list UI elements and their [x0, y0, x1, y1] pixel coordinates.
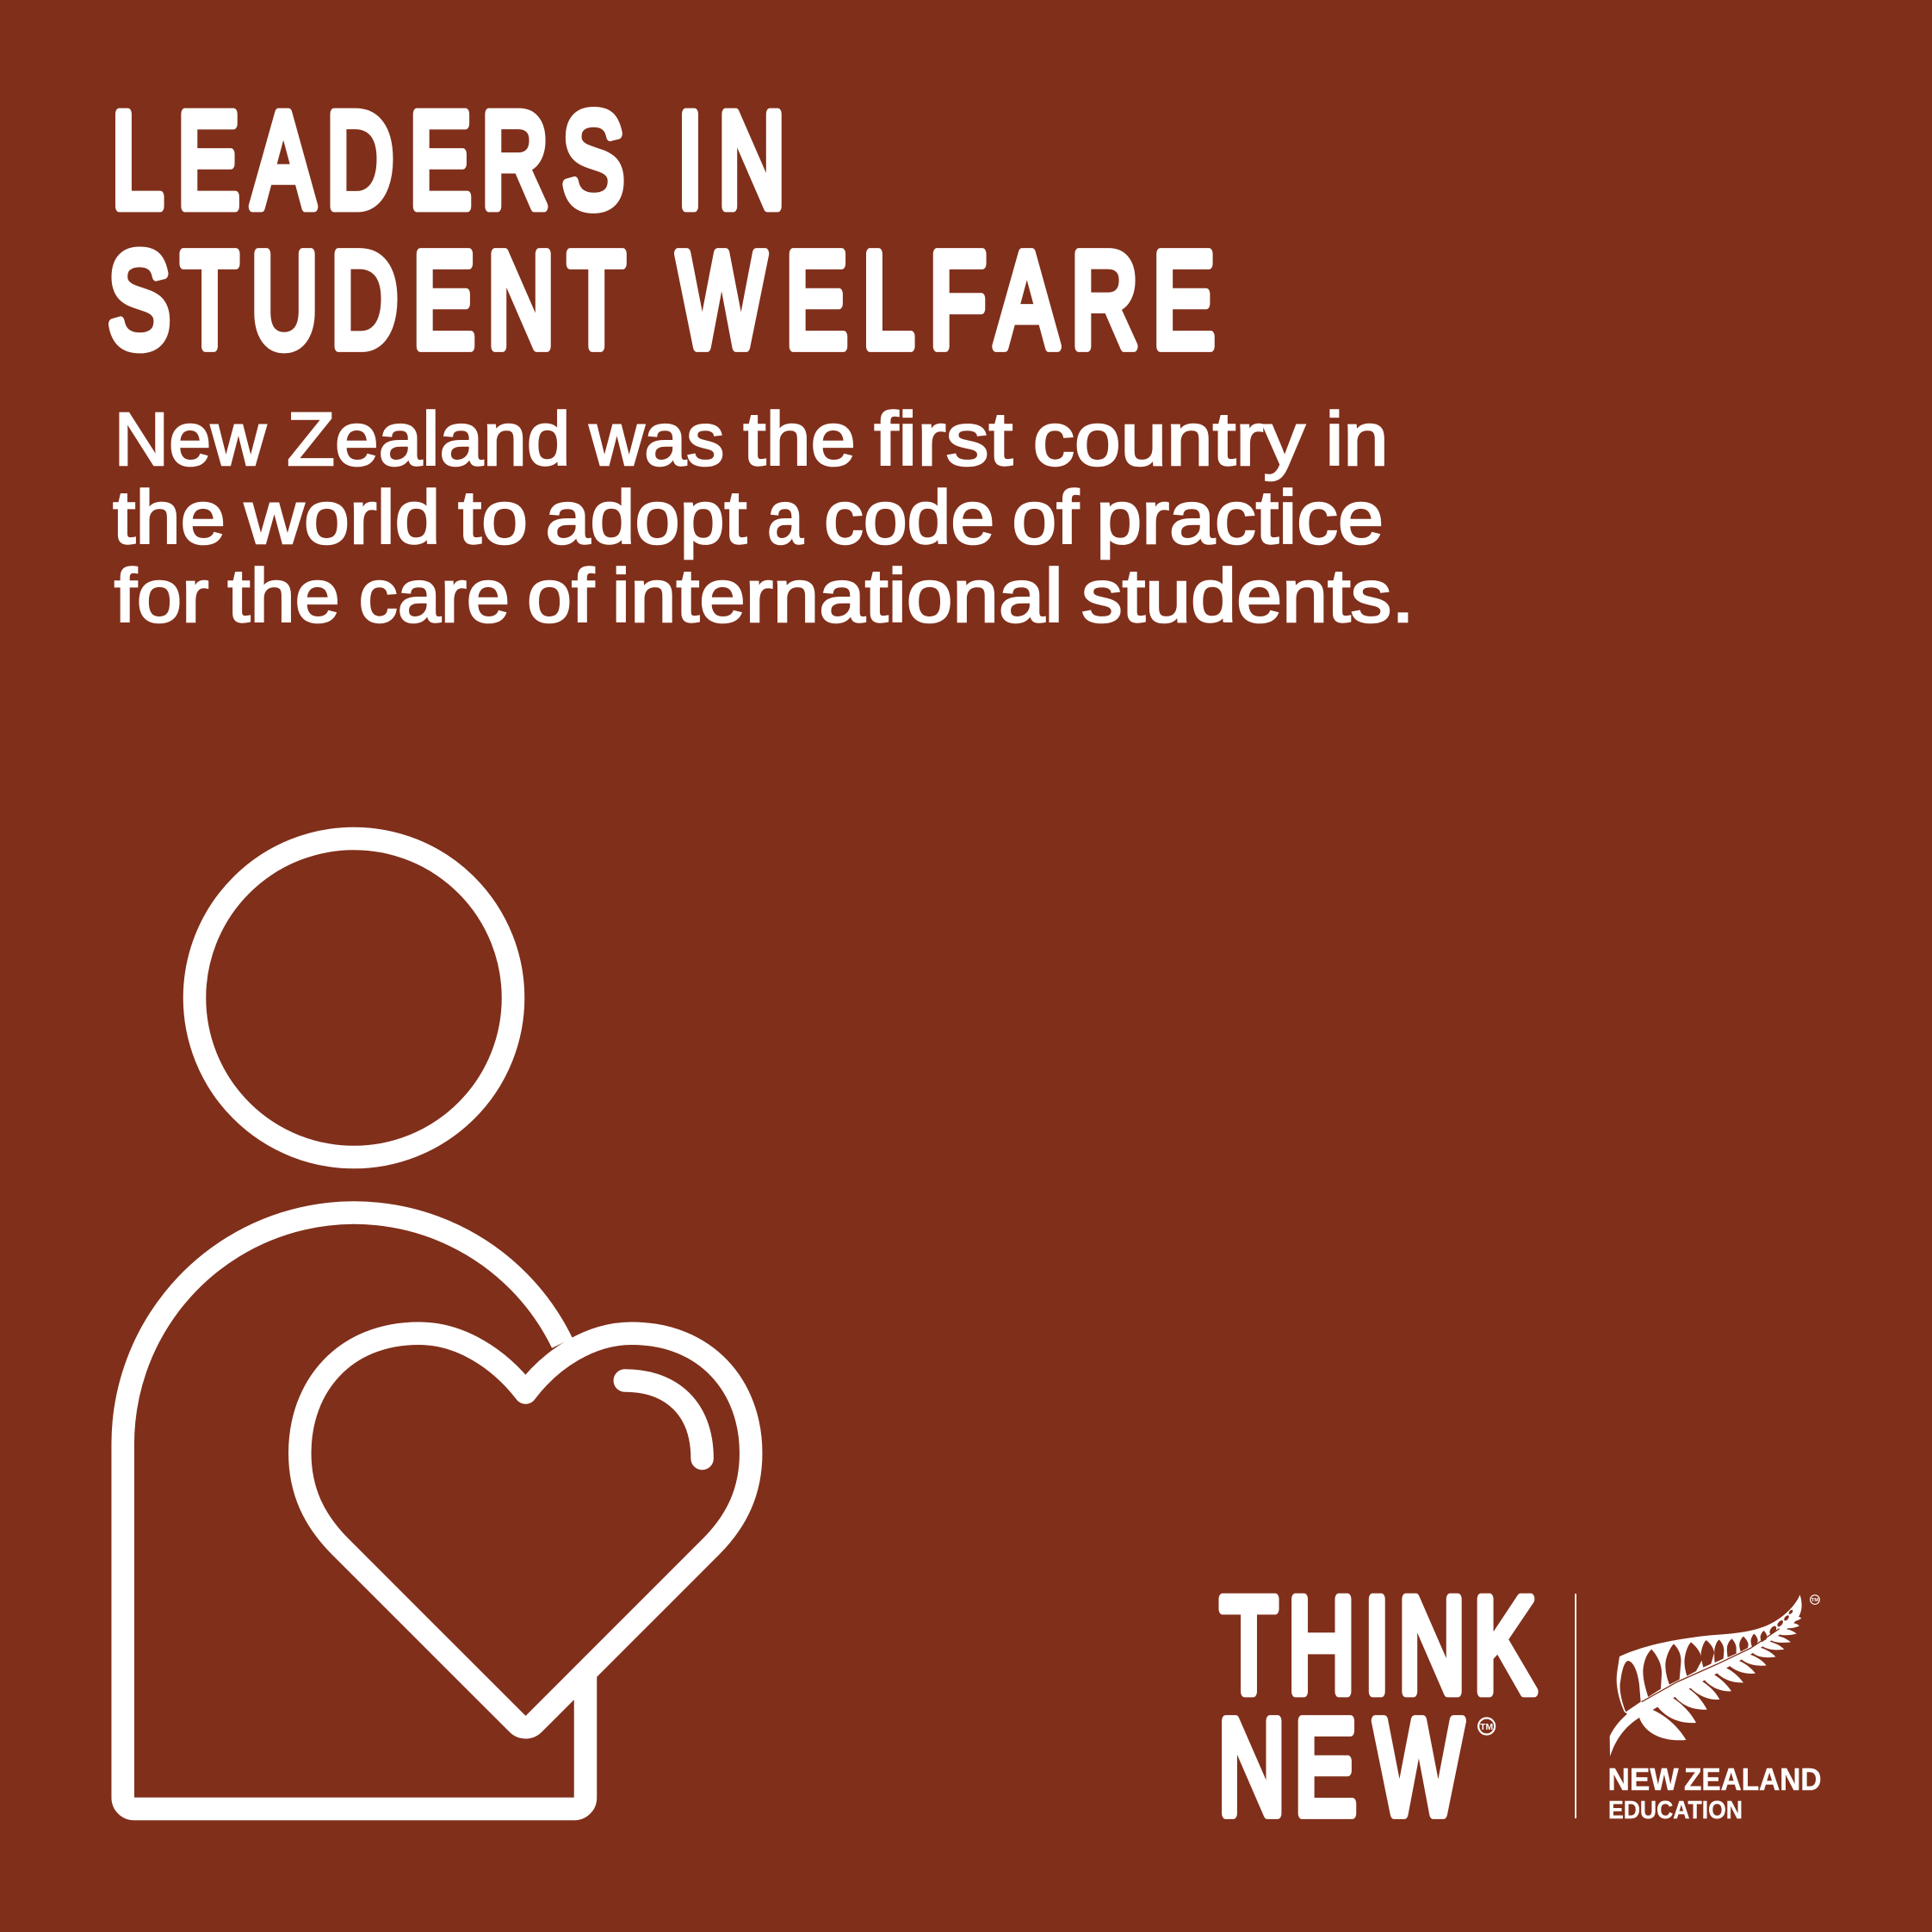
icon: body outline	[123, 1213, 585, 1809]
body line 3: of	[527, 554, 595, 638]
icon: head	[195, 839, 513, 1157]
wordmark: NEW ZEALAND: NEW	[1608, 1762, 1679, 1797]
trademark: Think New: TM	[1480, 1722, 1494, 1732]
body line 2: of	[1012, 476, 1080, 560]
body line 1: first	[874, 398, 1012, 481]
title line 1: LEADERS IN	[112, 84, 785, 236]
body line 1: Zealand	[287, 398, 570, 481]
trademark: fern	[1811, 1595, 1819, 1604]
body line 2: world	[244, 476, 441, 560]
logo: Think New	[1218, 1570, 1535, 1842]
body line 1: country	[1033, 398, 1305, 481]
trademark: Think New	[1478, 1718, 1495, 1734]
body line 3: international	[612, 554, 1063, 638]
icon: heart	[300, 1334, 751, 1727]
icon: silver fern	[1610, 1595, 1802, 1756]
icon: heart highlight	[625, 1381, 703, 1458]
title line 2: STUDENT WELFARE	[108, 224, 1215, 375]
trademark: fern: TM	[1811, 1598, 1818, 1603]
body line 1: New	[114, 398, 267, 481]
logo word: THINK: THINK	[1220, 1570, 1535, 1721]
body line 3: the	[227, 554, 340, 638]
body line 2: adopt	[546, 476, 746, 560]
body line 2: the	[113, 476, 226, 560]
body line 3: students.	[1081, 554, 1415, 638]
body line 2: to	[458, 476, 528, 560]
title	[108, 84, 1215, 375]
body line 1: was	[589, 398, 724, 481]
wordmark: EDUCATION: EDUCATION	[1608, 1797, 1743, 1824]
body line 1: in	[1326, 398, 1388, 481]
body line 2: a	[767, 476, 804, 560]
logo: New Zealand Education	[1608, 1595, 1822, 1824]
body line 2: code	[824, 476, 994, 560]
logo divider	[1575, 1594, 1576, 1818]
body line 3: for	[115, 554, 208, 638]
wordmark: NEW ZEALAND: ZEALAND	[1684, 1762, 1822, 1797]
body line 2: practice	[1096, 476, 1384, 560]
body line 1: the	[743, 398, 856, 481]
body text	[113, 398, 1415, 638]
logo word: NEW: NEW	[1218, 1691, 1463, 1842]
body line 3: care	[359, 554, 510, 638]
icon: person with heart	[123, 839, 751, 1809]
